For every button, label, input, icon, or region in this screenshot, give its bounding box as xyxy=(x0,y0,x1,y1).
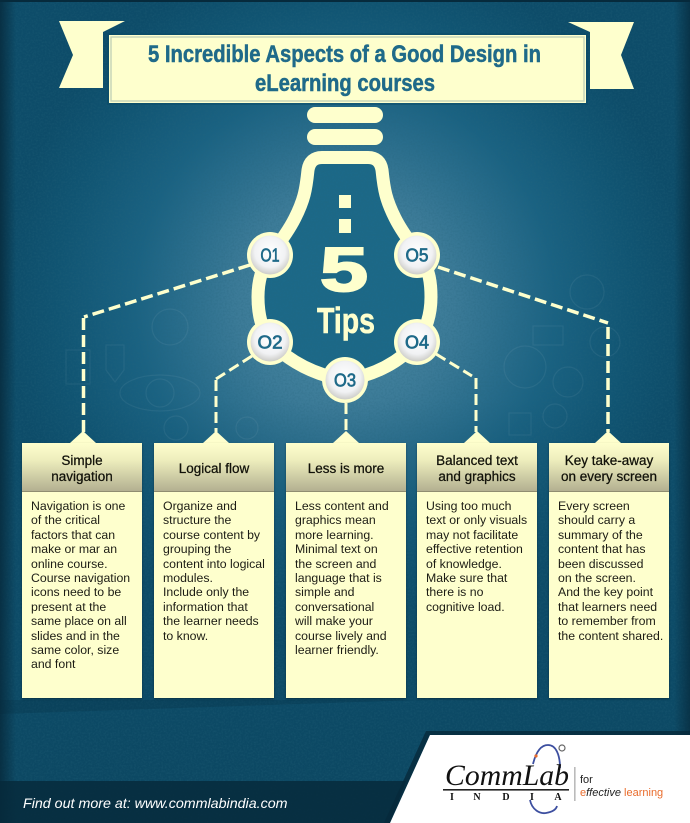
text: logical flow: information that xyxy=(163,600,248,614)
heading: less is more xyxy=(286,443,406,492)
text: logical flow: to know. xyxy=(163,629,208,643)
heading: logical flow: Logical flow xyxy=(179,460,249,476)
pointer: card 1 xyxy=(70,431,96,443)
text: simple navigation: factors that can xyxy=(31,528,115,542)
text: simple navigation: icons need to be xyxy=(31,585,121,599)
title banner: 5 Incredible Aspects of a Good Design in xyxy=(148,41,541,68)
pointer: card 4 xyxy=(464,431,490,443)
panel: balanced text and graphics xyxy=(417,443,537,698)
text: logical flow: content into logical xyxy=(163,557,265,571)
text: key take-away: Every screen xyxy=(558,499,630,513)
text: balanced text and graphics: text or only visuals xyxy=(426,513,527,527)
icon: light bulb xyxy=(250,107,440,390)
text: balanced text and graphics: effective retention xyxy=(426,542,523,556)
text: less is more: course lively and xyxy=(295,629,387,643)
logo: CommLab India: D xyxy=(502,792,510,803)
text: balanced text and graphics: Make sure that xyxy=(426,571,507,585)
text: less is more: graphics mean xyxy=(295,513,376,527)
text: logical flow xyxy=(163,499,265,643)
text: key take-away: should carry a xyxy=(558,513,635,527)
heading: less is more: Less is more xyxy=(308,460,384,476)
text: simple navigation: same place on all xyxy=(31,614,127,628)
badge 05 xyxy=(394,232,440,278)
text: less is more: the screen and xyxy=(295,557,376,571)
text: key take-away: summary of the xyxy=(558,528,643,542)
logo: CommLab India: CommLab xyxy=(445,759,569,792)
text: simple navigation: Course navigation xyxy=(31,571,130,585)
heading: simple navigation: navigation xyxy=(51,468,113,484)
text: key take-away: And the key point xyxy=(558,585,653,599)
heading: key take-away: on every screen xyxy=(561,468,657,484)
text: logical flow: Organize and xyxy=(163,499,237,513)
panel: simple navigation xyxy=(22,443,142,698)
badge 03 xyxy=(322,357,368,403)
badge 05: O5 xyxy=(406,246,428,266)
logo: CommLab India: effective learning xyxy=(580,787,663,799)
ribbon: right tail xyxy=(568,22,634,89)
badge 02 xyxy=(247,319,293,365)
text: simple navigation: online course. xyxy=(31,557,108,571)
heading: logical flow xyxy=(154,443,274,492)
title banner: eLearning courses xyxy=(255,70,435,97)
text: less is more: simple and xyxy=(295,585,354,599)
connector: tip 2 xyxy=(216,356,252,432)
badge 04 xyxy=(394,319,440,365)
heading: balanced text and graphics: and graphics xyxy=(438,468,516,484)
text: balanced text and graphics: of knowledge. xyxy=(426,557,502,571)
connector: tip 1 xyxy=(84,265,250,432)
ribbon: left tail xyxy=(59,21,125,88)
panel: logical flow xyxy=(154,443,274,698)
text: less is more: conversational xyxy=(295,600,374,614)
heading: simple navigation xyxy=(22,443,142,492)
pointer: card 2 xyxy=(203,431,229,443)
text: less is more xyxy=(295,499,389,657)
text: logical flow: course content by xyxy=(163,528,260,542)
logo: CommLab India: A xyxy=(554,792,562,803)
panel: key take-away xyxy=(549,443,669,698)
text: less is more: will make your xyxy=(295,614,373,628)
connector: tip 3 xyxy=(344,403,348,432)
footer link text: Find out more at: www.commlabindia.com xyxy=(23,796,288,812)
text: key take-away: content that has xyxy=(558,542,646,556)
heading: simple navigation: Simple xyxy=(61,452,103,468)
text: balanced text and graphics: may not facilitate xyxy=(426,528,518,542)
text: logical flow: structure the xyxy=(163,513,231,527)
text: logical flow: Include only the xyxy=(163,585,249,599)
text: key take-away: on the screen. xyxy=(558,571,636,585)
text: balanced text and graphics: there is no xyxy=(426,585,483,599)
text: less is more: Less content and xyxy=(295,499,389,513)
icon: light bulb: Tips xyxy=(317,300,375,341)
heading: balanced text and graphics: Balanced text xyxy=(436,452,518,468)
text: logical flow: grouping the xyxy=(163,542,231,556)
pointer: card 3 xyxy=(333,431,359,443)
text: balanced text and graphics: Using too much xyxy=(426,499,511,513)
connector: tip 4 xyxy=(436,354,476,432)
text: simple navigation: present at the xyxy=(31,600,106,614)
text: less is more: language that is xyxy=(295,571,382,585)
logo: CommLab India: I xyxy=(530,792,534,803)
heading: key take-away xyxy=(549,443,669,492)
heading: key take-away: Key take-away xyxy=(565,452,653,468)
text: key take-away: to remember from xyxy=(558,614,656,628)
logo panel xyxy=(390,735,690,823)
panel: less is more xyxy=(286,443,406,698)
footer band xyxy=(0,781,406,823)
text: simple navigation: Navigation is one xyxy=(31,499,125,513)
title banner xyxy=(107,33,588,105)
logo: CommLab India: for xyxy=(580,774,593,786)
badge 02: O2 xyxy=(258,332,282,352)
text: balanced text and graphics: cognitive load. xyxy=(426,600,505,614)
icon: light bulb: 5 xyxy=(320,236,368,305)
text: logical flow: the learner needs xyxy=(163,614,259,628)
text: less is more: Minimal text on xyxy=(295,542,378,556)
logo: CommLab India: N xyxy=(473,792,481,803)
pointer: card 5 xyxy=(595,431,621,443)
heading: balanced text and graphics xyxy=(417,443,537,492)
logo: CommLab India: I xyxy=(450,792,454,803)
text: simple navigation: same color, size xyxy=(31,643,119,657)
text: less is more: learner friendly. xyxy=(295,643,379,657)
badge 01 xyxy=(247,232,293,278)
text: simple navigation: slides and in the xyxy=(31,629,120,643)
text: key take-away xyxy=(558,499,663,643)
text: logical flow: modules. xyxy=(163,571,213,585)
badge 01: O1 xyxy=(260,246,280,266)
logo: CommLab India xyxy=(443,745,663,813)
text: simple navigation: of the critical xyxy=(31,513,100,527)
logo panel shadow xyxy=(384,731,690,823)
text: simple navigation: and font xyxy=(31,657,75,671)
text: simple navigation xyxy=(31,499,130,671)
text: balanced text and graphics xyxy=(426,499,527,614)
badge 04: O4 xyxy=(405,332,429,352)
connector: tip 5 xyxy=(438,267,608,432)
text: less is more: more learning. xyxy=(295,528,374,542)
text: key take-away: the content shared. xyxy=(558,629,663,643)
text: simple navigation: make or mar an xyxy=(31,542,117,556)
badge 03: O3 xyxy=(334,370,356,390)
text: key take-away: been discussed xyxy=(558,557,643,571)
text: key take-away: that learners need xyxy=(558,600,657,614)
